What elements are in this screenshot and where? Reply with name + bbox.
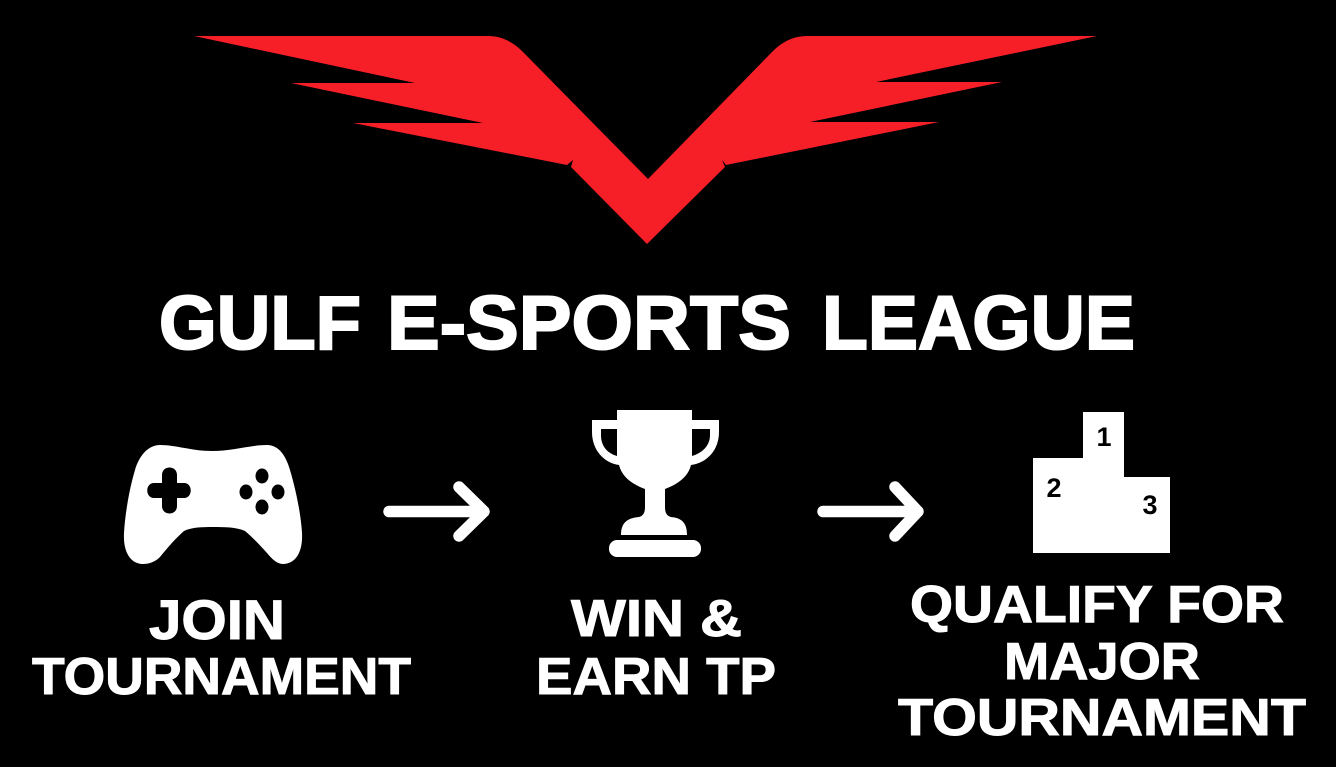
label: win and earn tp: EARN TP bbox=[536, 648, 776, 706]
icon: trophy bbox=[592, 410, 719, 557]
label: join tournament bbox=[32, 588, 411, 706]
label: join tournament: JOIN bbox=[149, 588, 285, 651]
logo: red wings bbox=[194, 36, 1097, 244]
label: win and earn tp bbox=[536, 590, 776, 706]
title bbox=[159, 281, 1135, 366]
icon: podium bbox=[1033, 412, 1170, 553]
label: qualify for major tournament: QUALIFY FOR bbox=[910, 576, 1284, 634]
label: join tournament: TOURNAMENT bbox=[32, 648, 411, 706]
icon: game controller bbox=[124, 445, 302, 564]
title: E-SPORTS bbox=[387, 281, 791, 366]
icon: podium: 2 bbox=[1046, 473, 1062, 503]
icon: podium: 3 bbox=[1142, 490, 1158, 520]
label: win and earn tp: WIN & bbox=[571, 590, 742, 648]
label: qualify for major tournament: TOURNAMENT bbox=[898, 689, 1306, 747]
label: qualify for major tournament: MAJOR bbox=[1004, 633, 1200, 691]
arrow: join to win bbox=[389, 487, 484, 536]
title: LEAGUE bbox=[822, 281, 1135, 366]
icon: podium: 1 bbox=[1096, 422, 1112, 452]
title: GULF bbox=[159, 281, 361, 366]
arrow: win to qualify bbox=[823, 487, 918, 536]
label: qualify for major tournament bbox=[898, 576, 1306, 747]
